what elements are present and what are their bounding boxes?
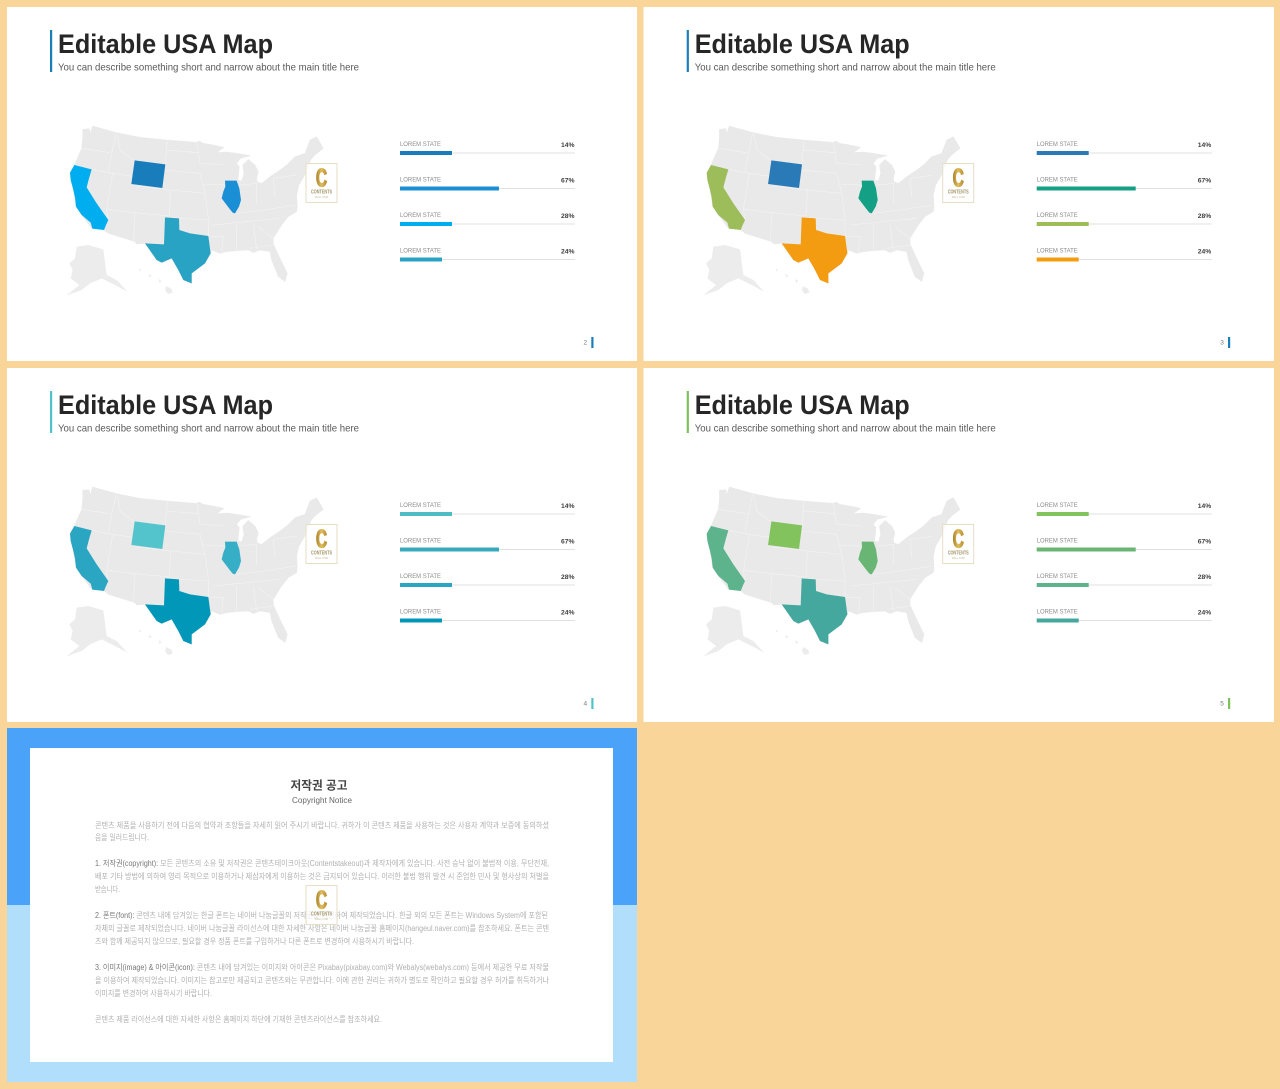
title block (50, 29, 359, 74)
title block: You can describe something short and narrow about the main title here (58, 62, 359, 74)
bar list: LOREM STATE (400, 178, 441, 184)
notice body text: 콘텐츠 제품 라이선스에 대한 자세한 사항은 홈페이지 하단에 기재한 콘텐츠라이선스를 참조하세요. (95, 1014, 382, 1024)
bar list: LOREM STATE (400, 538, 441, 544)
bar list: 14% (1198, 503, 1211, 510)
notice body text (95, 820, 550, 1024)
bar list (400, 142, 575, 262)
title block (687, 29, 996, 74)
title block (50, 390, 359, 434)
bar list: LOREM STATE (1037, 248, 1078, 254)
panel: slide 3 multicolor map (644, 7, 1274, 361)
bar list: 28% (1198, 213, 1211, 220)
bar list: LOREM STATE (1037, 574, 1078, 580)
bar list: LOREM STATE (400, 574, 441, 580)
page number (584, 698, 594, 709)
panel: copyright notice slide (7, 728, 637, 1082)
bar list: LOREM STATE (1037, 503, 1078, 509)
logo watermark (306, 886, 337, 924)
page number: 4 (584, 700, 588, 708)
title block: Editable USA Map (695, 390, 910, 420)
logo watermark (306, 524, 337, 564)
title block: Editable USA Map (695, 29, 910, 59)
bar list: 24% (1198, 248, 1211, 256)
logo watermark (943, 164, 974, 202)
notice heading: 저작권 공고 (290, 778, 348, 792)
panel: slide 5 green map (644, 368, 1274, 722)
notice body text: 2. 폰트(font): 콘텐츠 내에 담겨있는 한글 폰트는 네이버 나눔글꼴의 저작권을 기반하여 제작되었습니다. 한글 외의 모든 폰트는 Windows System에 포함된 (95, 910, 548, 920)
bar list: LOREM STATE (1037, 142, 1078, 148)
bar list: LOREM STATE (400, 503, 441, 509)
notice body text: 받습니다. (95, 884, 120, 894)
bar list (1037, 503, 1212, 622)
USA map (703, 487, 960, 656)
bar list: 14% (1198, 142, 1211, 149)
page number: 3 (1220, 340, 1224, 346)
panel: slide 4 teal map (7, 368, 637, 722)
bar list: 24% (561, 610, 575, 616)
bar list: 14% (561, 142, 575, 149)
notice body text: 배포 기타 방법에 의하여 영리 목적으로 이용하거나 제삼자에게 이용하는 것은 금지되어 있습니다. 이러한 불법 행위 발견 시 준엄한 민사 및 형사상의 처벌을 (95, 871, 549, 881)
USA map (67, 487, 323, 656)
notice body text: 3. 이미지(image) & 아이콘(icon): 콘텐츠 내에 담겨있는 이미지와 아이콘은 Pixabay(pixabay.com)와 Webalys(webalys.com) 등에서 제공한 무료 저작물 (95, 962, 549, 972)
page number (584, 337, 594, 348)
bar list: 67% (1198, 538, 1211, 546)
bar list: 24% (1198, 610, 1211, 616)
title block: You can describe something short and narrow about the main title here (695, 62, 996, 74)
notice body text: 츠와 함께 제공되지 않으므로, 필요할 경우 정품 폰트를 구입하거나 다른 폰트로 변경하여 사용하시기 바랍니다. (95, 936, 414, 946)
bar list: LOREM STATE (1037, 610, 1078, 616)
title block: Editable USA Map (58, 29, 273, 59)
bar list: LOREM STATE (1037, 178, 1078, 184)
title block (687, 390, 996, 434)
title block: Editable USA Map (58, 390, 273, 420)
bar list (1037, 142, 1212, 262)
logo watermark (306, 164, 337, 202)
title block: You can describe something short and narrow about the main title here (58, 422, 359, 434)
bar list: 28% (1198, 574, 1211, 581)
bar list: LOREM STATE (1037, 538, 1078, 544)
notice body text: 음을 일러드립니다. (95, 832, 149, 842)
notice subheading: Copyright Notice (292, 795, 352, 805)
USA map (67, 126, 323, 295)
bar list: 28% (561, 574, 575, 581)
page number: 5 (1220, 700, 1224, 708)
page number (1220, 698, 1230, 709)
bar list: LOREM STATE (400, 142, 441, 148)
notice body text: 자체의 글꼴로 제작되었습니다. 네이버 나눔글꼴 라이선스에 대한 자세한 사항은 네이버 나눔글꼴 홈페이지(hangeul.naver.com)를 참조하세요. 폰트는 콘텐 (95, 923, 549, 933)
bar list: 67% (561, 538, 575, 546)
bar list: LOREM STATE (400, 610, 441, 616)
logo watermark (943, 524, 974, 564)
bar list: 24% (561, 248, 575, 256)
notice body text: 1. 저작권(copyright): 모든 콘텐츠의 소유 및 저작권은 콘텐츠테이크아웃(Contentstakeout)과 제작자에게 있습니다. 사전 승낙 없이 불법적 이용, 무단전재, (95, 858, 549, 868)
USA map (703, 126, 960, 295)
title block: You can describe something short and narrow about the main title here (695, 422, 996, 434)
notice body text: 콘텐츠 제품을 사용하기 전에 다음의 협약과 조항들을 자세히 읽어 주시기 바랍니다. 귀하가 이 콘텐츠 제품을 사용하는 것은 사용자 계약과 보증에 동의하셨 (95, 820, 550, 830)
bar list: LOREM STATE (400, 213, 441, 219)
bar list: 14% (561, 503, 575, 510)
bar list: LOREM STATE (400, 248, 441, 254)
bar list (400, 503, 575, 622)
bar list: 67% (1198, 178, 1211, 184)
panel: slide 2 blue map (7, 7, 637, 361)
notice body text: 을 이용하여 제작되었습니다. 이미지는 참고로만 제공되고 콘텐츠와는 무관합니다. 이에 관한 권리는 귀하가 별도로 확인하고 필요할 경우 허가를 취득하거나 (95, 975, 550, 985)
notice body text: 이미지를 변경하여 사용하시기 바랍니다. (95, 988, 212, 998)
page number: 2 (584, 340, 588, 346)
bar list: LOREM STATE (1037, 213, 1078, 219)
bar list: 28% (561, 213, 575, 220)
bar list: 67% (561, 178, 575, 184)
page number (1220, 337, 1230, 348)
